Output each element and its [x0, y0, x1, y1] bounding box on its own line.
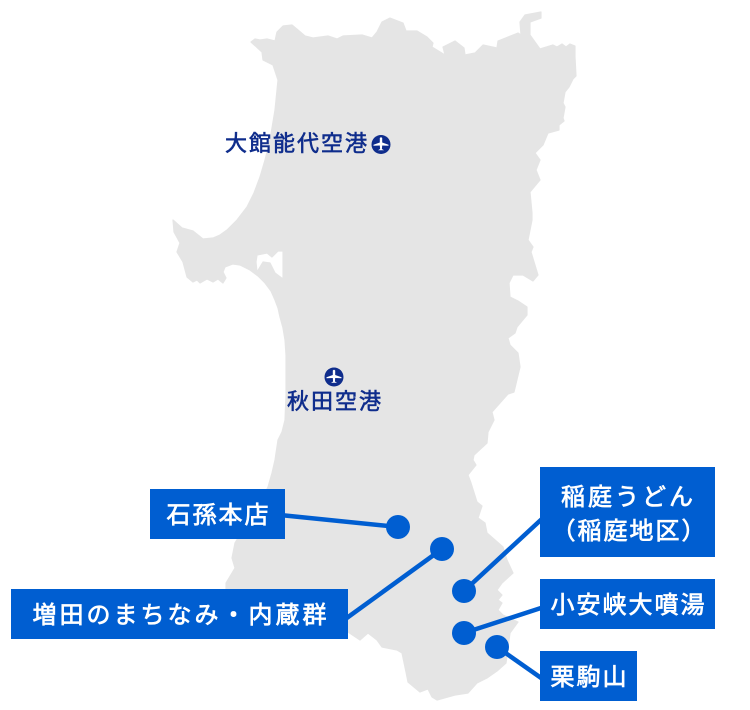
callout: 栗駒山: 栗駒山 — [550, 664, 628, 691]
map: Akita prefecture — [173, 12, 576, 700]
callout: 小安峡大噴湯: 小安峡大噴湯 — [550, 592, 706, 619]
icon: airplane, 秋田空港 — [324, 368, 344, 386]
callout: 石孫本店: 石孫本店 — [166, 502, 270, 529]
callout: 増田のまちなみ・内蔵群: 増田のまちなみ・内蔵群 — [32, 602, 330, 629]
label: 秋田空港: 秋田空港 — [287, 389, 383, 414]
callout: 稲庭うどん（稲庭地区）: （稲庭地区） — [552, 518, 708, 545]
callout: 小安峡大噴湯 — [452, 579, 715, 645]
label: 大館能代空港: 大館能代空港 — [225, 131, 369, 156]
callout: 石孫本店 — [150, 489, 410, 539]
callout: 稲庭うどん（稲庭地区） — [452, 467, 715, 603]
callout: 栗駒山 — [485, 635, 637, 701]
callout: 増田のまちなみ・内蔵群 — [11, 537, 454, 639]
callout: 稲庭うどん（稲庭地区）: 稲庭うどん — [561, 484, 696, 511]
icon: airplane, 大館能代空港 — [372, 135, 390, 154]
